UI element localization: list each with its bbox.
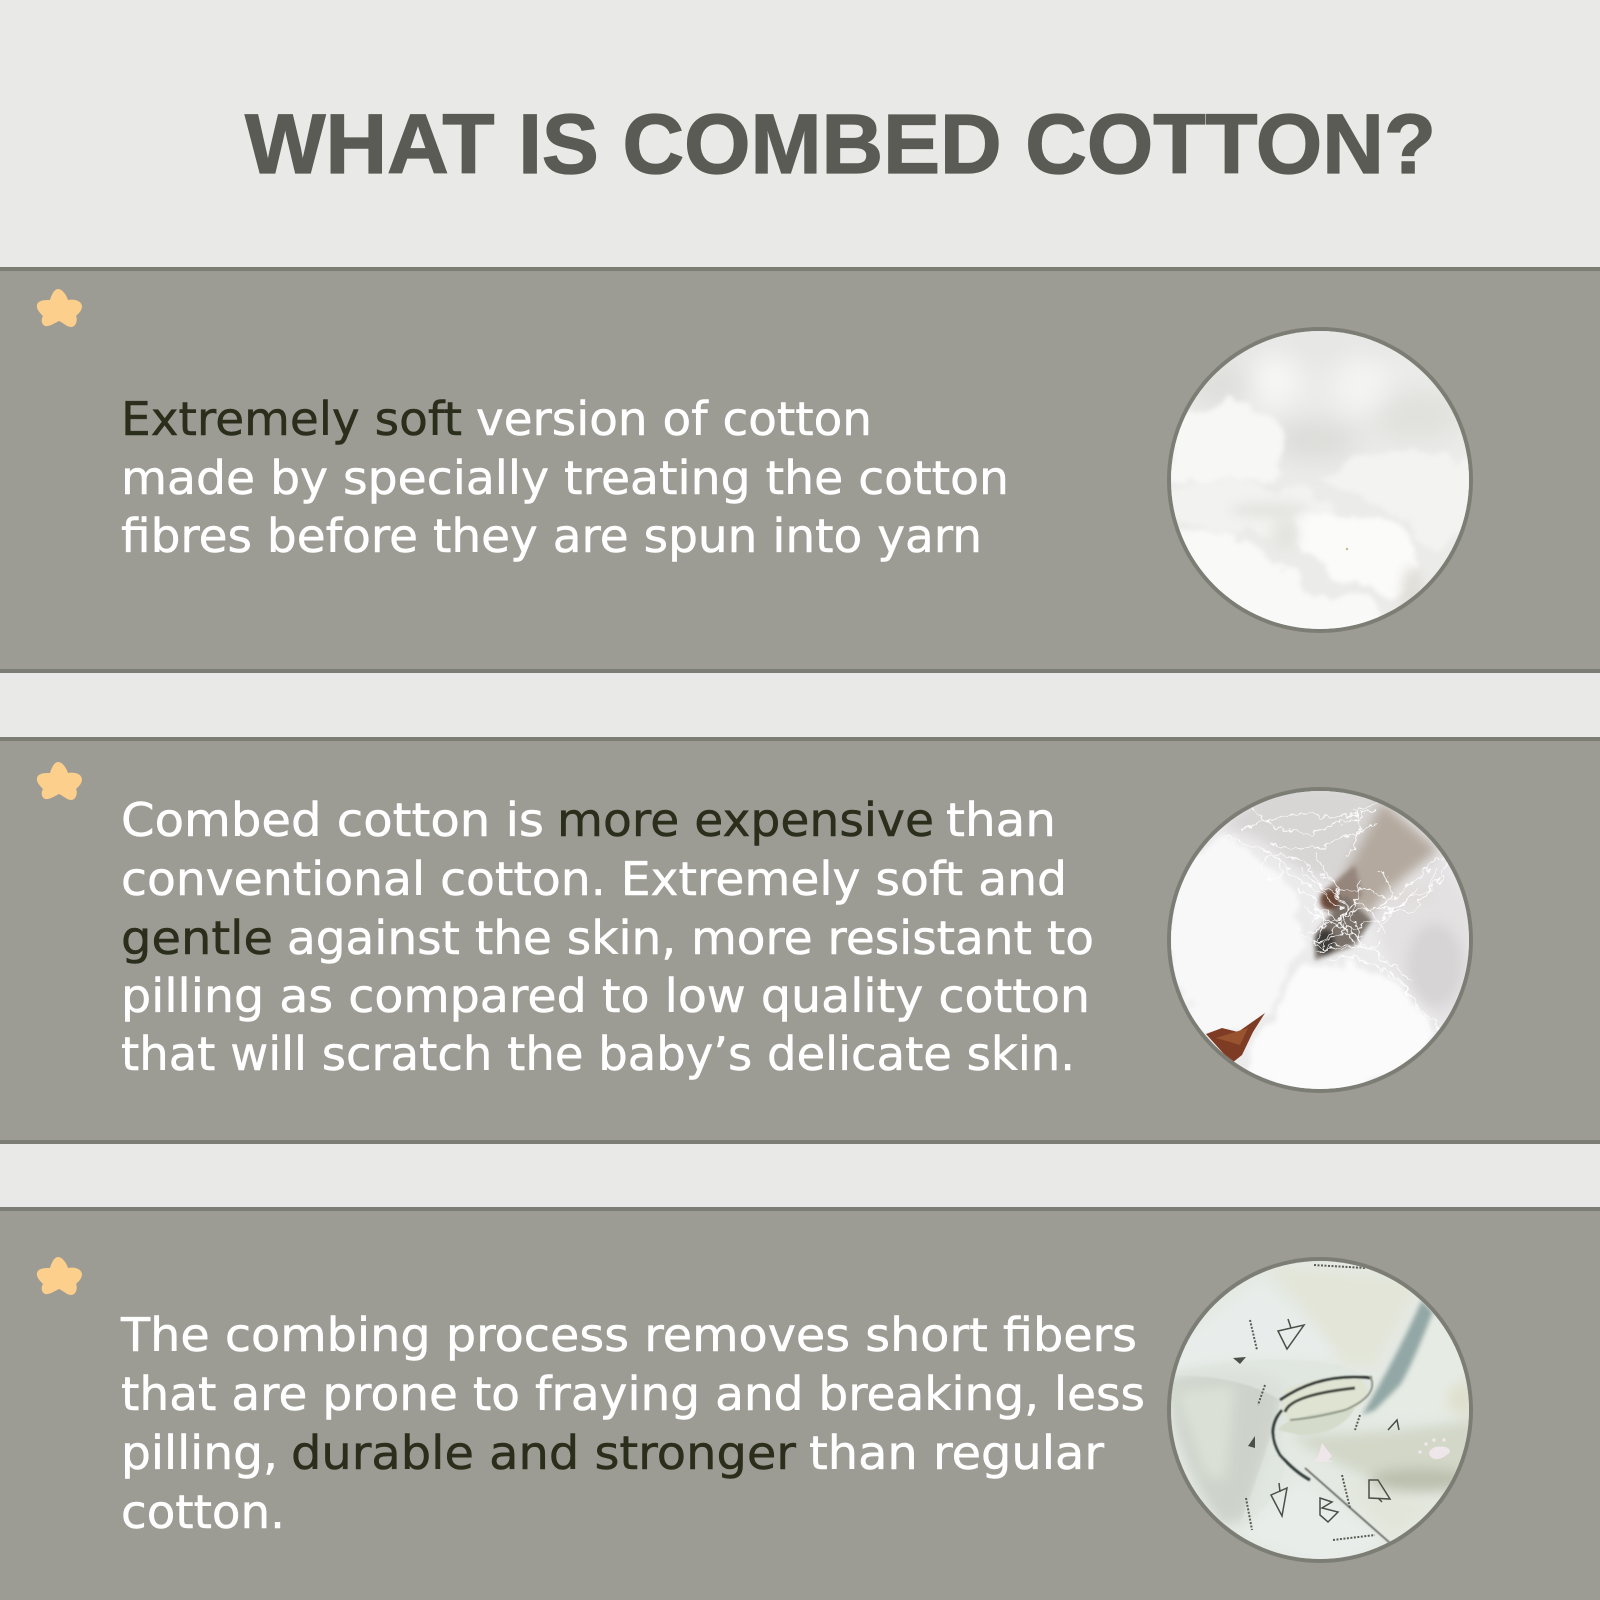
text block: softness and price description: Combed cotton is xyxy=(121,793,544,847)
title: WHAT IS COMBED COTTON? xyxy=(245,97,1436,191)
text block: combing process description: that are prone to fraying and breaking, less xyxy=(121,1367,1145,1421)
central swirl folds xyxy=(1170,1359,1390,1543)
panel: durable and stronger xyxy=(0,1209,1600,1600)
photo: twisted printed fabric xyxy=(1167,1257,1473,1563)
text block: combing process description: than regular xyxy=(809,1426,1104,1480)
text block: soft cotton description: version of cotton xyxy=(476,392,872,446)
printed small pattern xyxy=(1246,1265,1375,1540)
icon: star xyxy=(37,1257,82,1295)
panel background band xyxy=(0,269,1600,671)
text block: soft cotton description: fibres before they are spun into yarn xyxy=(121,509,982,563)
text block: combing process description: pilling, xyxy=(121,1426,278,1480)
text block: combing process description: cotton. xyxy=(121,1485,285,1539)
text block: softness and price description xyxy=(121,793,1094,1081)
panel: more expensive xyxy=(0,739,1600,1142)
text block: softness and price description: more expensive xyxy=(557,793,934,847)
text block: softness and price description: that will scratch the baby’s delicate skin. xyxy=(121,1027,1075,1081)
printed tree outlines xyxy=(1271,1319,1399,1522)
text block: softness and price description: than xyxy=(946,793,1056,847)
icon: star xyxy=(37,289,82,327)
text block: softness and price description: gentle xyxy=(121,911,273,965)
icon: star xyxy=(37,762,82,800)
panel background band xyxy=(0,739,1600,1142)
text block: combing process description: The combing process removes short fibers xyxy=(120,1308,1137,1362)
text block: combing process description xyxy=(120,1308,1145,1539)
photo: cotton boll xyxy=(1167,787,1473,1093)
text block: soft cotton description xyxy=(121,392,1009,563)
printed paw and tree xyxy=(1314,1438,1450,1462)
panel: extremely soft xyxy=(0,269,1600,671)
text block: soft cotton description: made by specially treating the cotton xyxy=(121,451,1009,505)
text block: softness and price description: pilling as compared to low quality cotton xyxy=(121,969,1090,1023)
shaded blue fold xyxy=(1362,1300,1433,1415)
text block: softness and price description: conventional cotton. Extremely soft and xyxy=(121,852,1067,906)
text block: soft cotton description: Extremely soft xyxy=(121,392,462,446)
text block: combing process description: durable and stronger xyxy=(291,1426,796,1480)
text block: softness and price description: against the skin, more resistant to xyxy=(287,911,1094,965)
photo: fluffy cotton xyxy=(1167,327,1473,633)
panel background band xyxy=(0,1209,1600,1600)
